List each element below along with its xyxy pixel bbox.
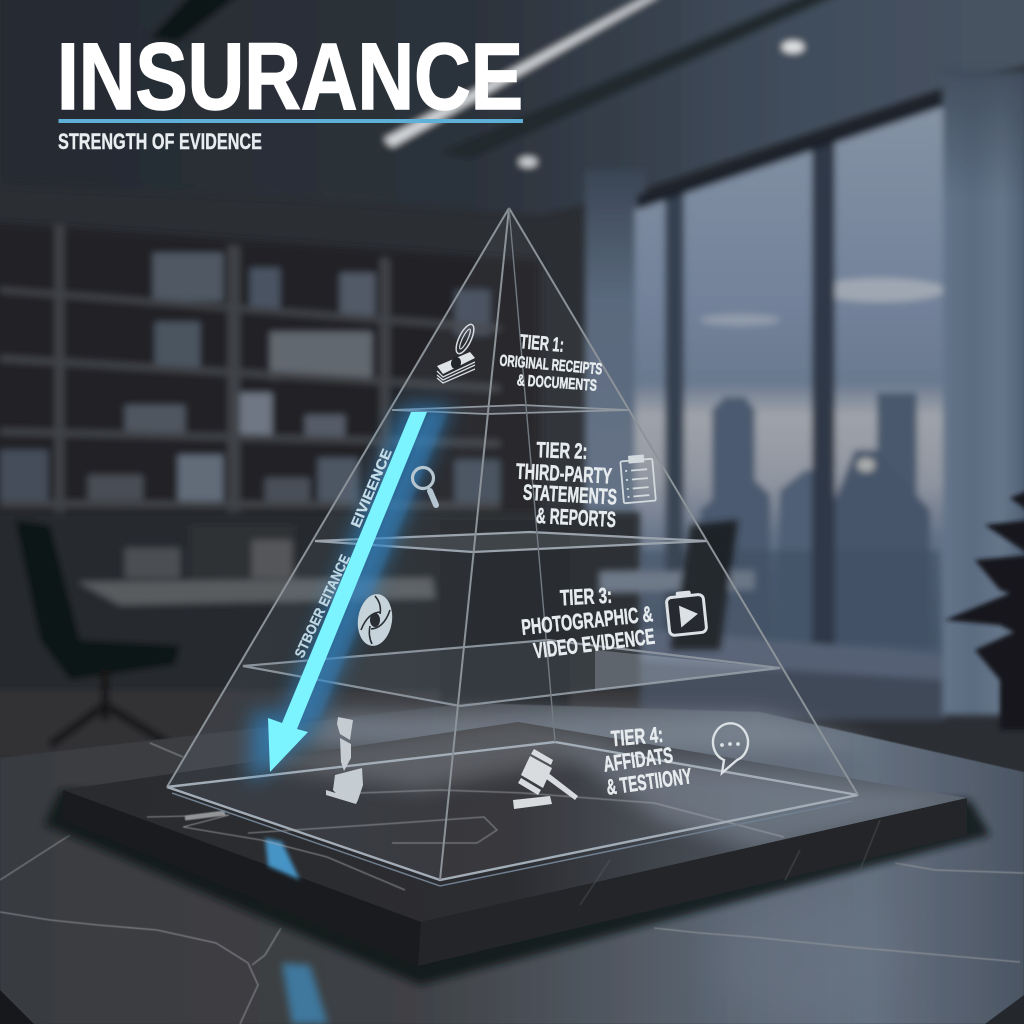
glass tier level 3 (243, 640, 780, 706)
title underline (58, 119, 523, 123)
tier 1 text: & DOCUMENTS (516, 372, 598, 395)
tier 4 text: AFFIDATS (602, 742, 674, 777)
marble base slab (63, 715, 967, 966)
tier 4 text: & TESTIIONY (605, 763, 694, 800)
title: INSURANCE (57, 24, 523, 130)
tier 2 text: STATEMENTS (522, 480, 618, 509)
tier 1 text: ORIGINAL RECEIPTS (499, 353, 603, 378)
icon: magnifying glass (412, 468, 436, 505)
tier 2 text: THIRD-PARTY (515, 459, 613, 489)
tier 2 text (515, 437, 618, 532)
icon: clipboard (620, 455, 656, 503)
tier 2 text: TIER 2: (536, 437, 588, 464)
icon: video play (666, 589, 707, 636)
glass pyramid (167, 208, 858, 886)
tier 1 text: TIER 1: (519, 331, 565, 357)
window with city skyline (585, 70, 1024, 720)
icon: broken pillar (326, 717, 363, 804)
potted plant (945, 490, 1024, 730)
icon: camera aperture (355, 592, 395, 648)
glass tier level 1 (392, 405, 628, 414)
glass tier level 2 (315, 532, 707, 552)
pyramid base edge (167, 742, 858, 880)
arrow reflection on table (282, 963, 328, 1024)
tier 3 text: VIDEO EVIDENCE (532, 624, 656, 663)
arrow label: evidence: EIVIEENCE (347, 446, 395, 530)
subtitle: STRENGTH OF EVIDENCE (58, 129, 262, 154)
icon: speech bubble (713, 723, 748, 773)
marble tabletop (0, 703, 1024, 1024)
glowing strength arrow (250, 405, 452, 785)
ceiling (0, 0, 1024, 215)
icon: gavel (513, 749, 578, 809)
arrow reflection on slab (265, 838, 300, 880)
tier 3 text: PHOTOGRAPHIC & (520, 601, 654, 640)
arrow label: stronger evidence: STBOER EITANCE (291, 552, 353, 660)
tier 3 text: TIER 3: (559, 583, 613, 610)
pyramid edges (167, 208, 858, 880)
tier 2 text: & REPORTS (535, 503, 617, 532)
icon: paperclip and banknotes (437, 322, 477, 383)
glass reflection on level 3 (595, 650, 775, 690)
tier 4 text (602, 722, 694, 800)
bookshelves (0, 222, 540, 560)
slab shadow (45, 790, 990, 985)
tier 1 text (499, 331, 603, 395)
glass faces (167, 208, 509, 880)
pyramid base front highlight (172, 793, 852, 886)
office desk and chairs (0, 512, 755, 760)
tier 4 text: TIER 4: (610, 722, 664, 751)
tier 3 text (520, 583, 656, 663)
